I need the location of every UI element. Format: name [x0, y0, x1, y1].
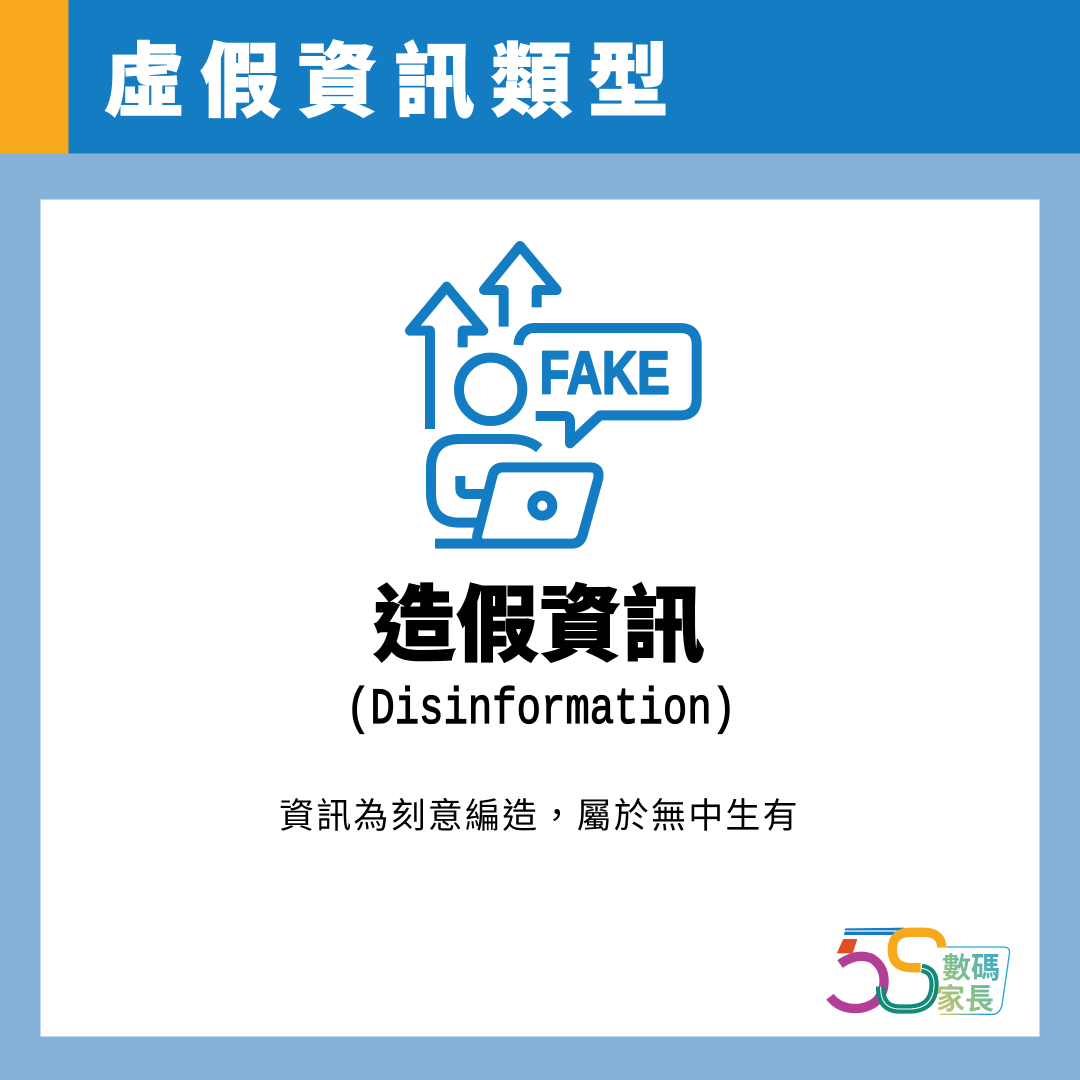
- fake label: FAKE: [540, 338, 670, 406]
- panel: white content card: [40, 200, 1040, 1036]
- logo: blue bars: [844, 928, 904, 935]
- heading: disinformation chinese: 造假資訊: [373, 558, 705, 678]
- icon: arm: [460, 476, 485, 494]
- header banner: [0, 0, 1080, 154]
- logo: orange curve: [892, 932, 942, 968]
- logo text: [936, 945, 1000, 1018]
- icon: laptop logo: [532, 496, 552, 516]
- icon: body: [431, 439, 539, 523]
- logo: purple five: [830, 956, 884, 1009]
- arrow: left: [410, 287, 483, 429]
- logo: red flag: [837, 939, 857, 953]
- logo text line two: 家長: [936, 976, 994, 1018]
- heading: disinformation english: (Disinformation): [346, 682, 736, 739]
- logo: green curve: [881, 968, 934, 1009]
- icon: laptop: [435, 467, 599, 544]
- logo text line one: 數碼: [942, 945, 1000, 987]
- logo: rounded outline: [940, 947, 1010, 1014]
- icon: fake news person with laptop and arrows: [410, 246, 697, 544]
- icon: head: [459, 358, 522, 421]
- arrow: right: [484, 246, 557, 327]
- description text: 資訊為刻意編造，屬於無中生有: [279, 788, 800, 839]
- logo: 55 anniversary: [830, 928, 1010, 1014]
- title: 虛假資訊類型: [103, 17, 685, 134]
- speech bubble: [518, 328, 697, 443]
